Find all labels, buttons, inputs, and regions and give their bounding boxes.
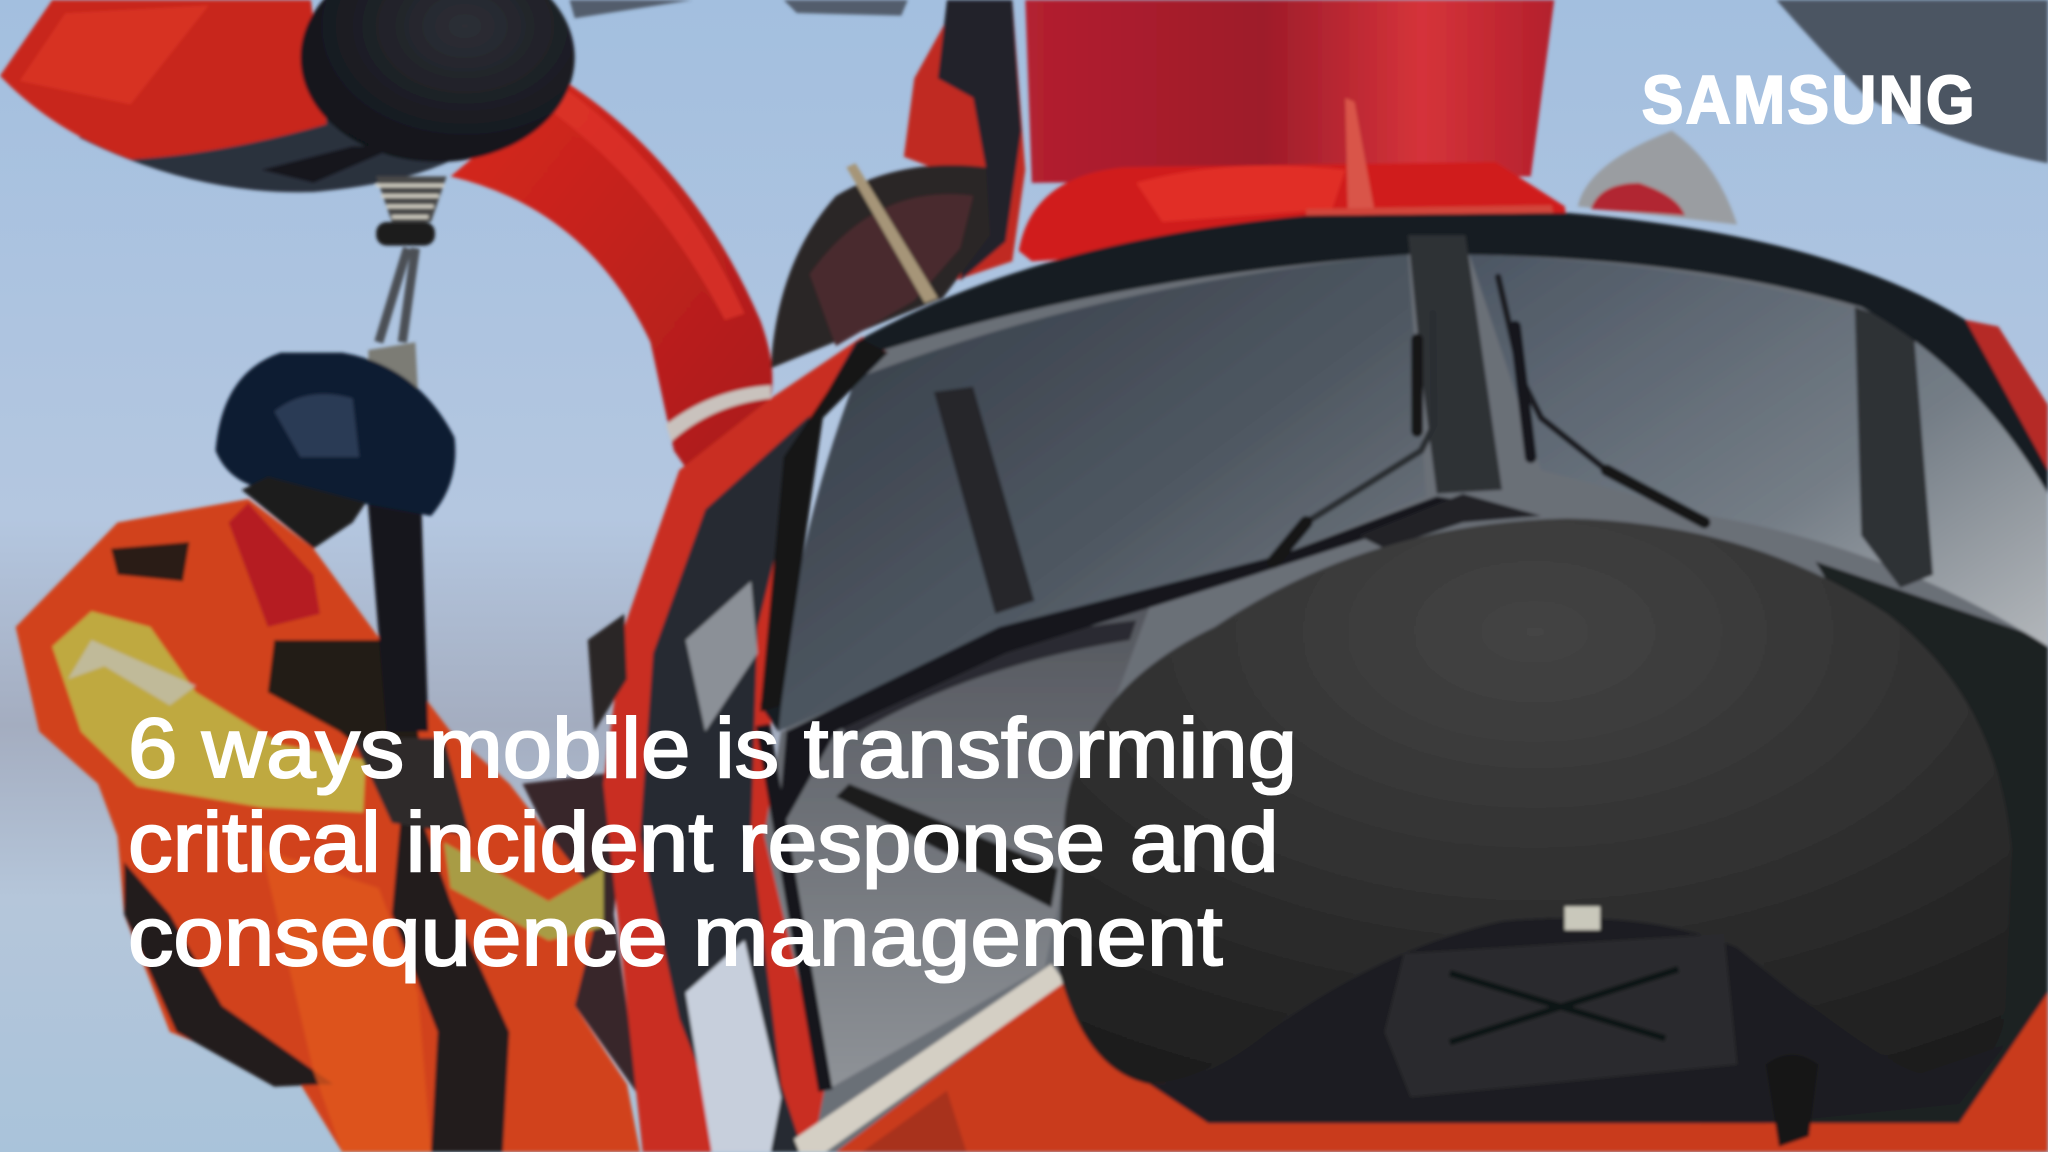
rotor blade blur, top right xyxy=(569,0,2048,163)
windshield frame xyxy=(760,213,2048,836)
black radome nose xyxy=(1058,519,2011,1147)
fuselage base behind glass xyxy=(764,222,2048,1152)
left side mechanical structure xyxy=(771,0,1025,368)
rescuer's far arm and harness behind door xyxy=(522,771,640,1097)
rotor pod xyxy=(0,0,575,192)
right windshield pane xyxy=(1469,255,2048,647)
title: 6 ways mobile is transforming xyxy=(128,700,1297,795)
side lower window xyxy=(763,607,1149,1091)
lower right dark fuselage xyxy=(1698,562,2048,1126)
Samsung logo: SAMSUNG xyxy=(1642,61,1975,137)
title: critical incident response and xyxy=(128,794,1279,889)
title xyxy=(128,700,1297,983)
wipers xyxy=(1273,277,1704,564)
rescuer body xyxy=(16,477,640,1152)
door frame, red xyxy=(588,337,888,1152)
red tail arch xyxy=(451,81,772,496)
red nose and white strip xyxy=(794,964,2048,1152)
hoist hook and chain xyxy=(368,176,447,457)
left windshield pane xyxy=(778,255,1426,731)
helmet xyxy=(216,353,455,549)
title: consequence management xyxy=(128,888,1223,983)
mast cowling xyxy=(1019,0,1567,261)
tail light xyxy=(1578,131,1737,225)
